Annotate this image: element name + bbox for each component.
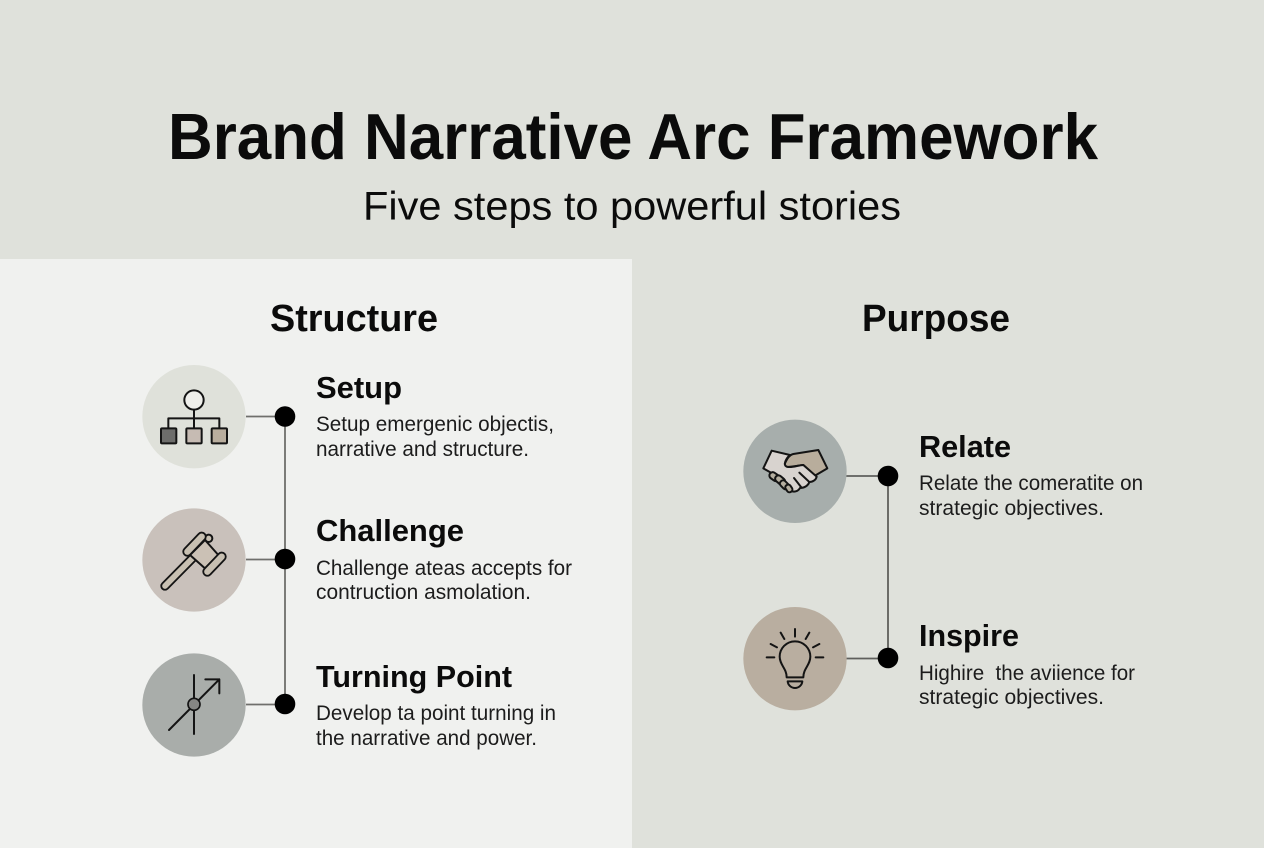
text: challenge bbox=[316, 513, 572, 604]
icon: gavel bbox=[142, 508, 246, 612]
text: challenge: Challenge bbox=[316, 513, 464, 548]
timeline: structure bbox=[246, 406, 295, 714]
text: turning point bbox=[316, 659, 556, 750]
text: setup: narrative and structure. bbox=[316, 438, 529, 461]
icon: hierarchy bbox=[142, 365, 246, 468]
icon: turning point bbox=[142, 653, 246, 757]
icon: handshake bbox=[743, 420, 847, 523]
panel: structure bbox=[0, 259, 632, 848]
subtitle: Five steps to powerful stories bbox=[363, 184, 901, 228]
timeline: purpose bbox=[846, 466, 898, 668]
heading: structure: Structure bbox=[270, 298, 438, 340]
text: setup bbox=[316, 370, 554, 461]
title: Brand Narrative Arc Framework bbox=[168, 100, 1099, 173]
text: turning point: Develop ta point turning in bbox=[316, 702, 556, 725]
text: challenge: contruction asmolation. bbox=[316, 581, 531, 604]
heading: purpose: Purpose bbox=[862, 298, 1010, 340]
text: turning point: Turning Point bbox=[316, 659, 512, 694]
text: inspire: Highire the aviience for bbox=[919, 662, 1135, 685]
text: relate: Relate bbox=[919, 429, 1011, 464]
text: setup: Setup bbox=[316, 370, 402, 405]
text: relate: Relate the comeratite on bbox=[919, 472, 1143, 495]
text: setup: Setup emergenic objectis, bbox=[316, 413, 554, 436]
text: turning point: the narrative and power. bbox=[316, 727, 537, 750]
text: inspire: strategic objectives. bbox=[919, 686, 1104, 709]
text: relate: strategic objectives. bbox=[919, 497, 1104, 520]
text: challenge: Challenge ateas accepts for bbox=[316, 557, 572, 580]
icon: lightbulb bbox=[743, 607, 847, 710]
text: inspire: Inspire bbox=[919, 618, 1019, 653]
text: relate bbox=[919, 429, 1143, 520]
text: inspire bbox=[919, 618, 1135, 709]
panel: purpose bbox=[743, 298, 1143, 710]
